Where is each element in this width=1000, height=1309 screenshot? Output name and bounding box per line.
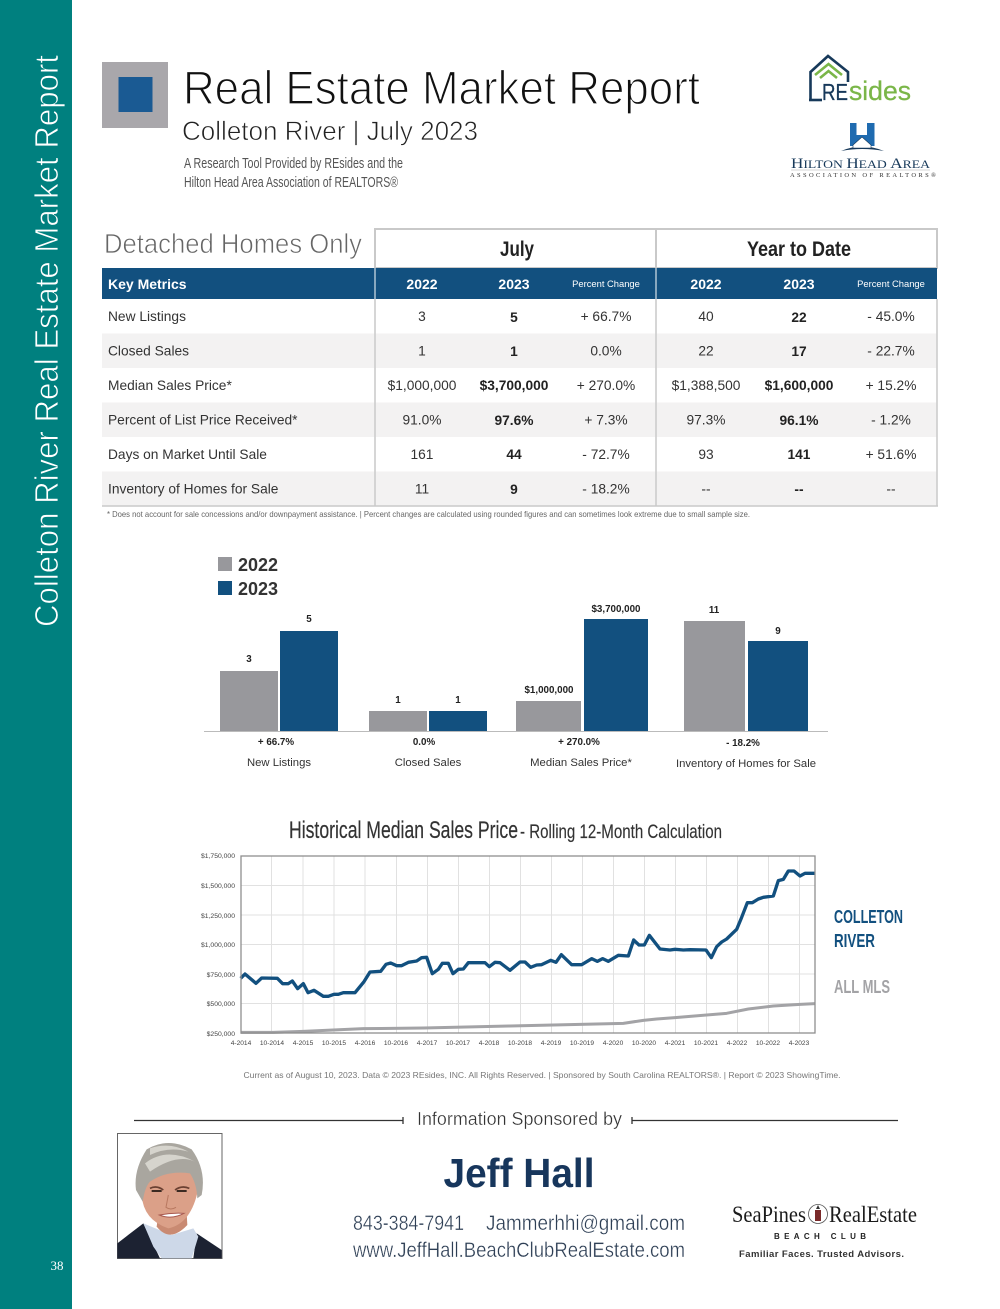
- row: closed sales: 1: [418, 344, 426, 358]
- y axis labels: $1,750,000: [201, 853, 235, 860]
- y axis labels: $750,000: [207, 972, 235, 979]
- row: days on market: 161: [411, 447, 433, 462]
- table header row: [102, 268, 937, 299]
- bars: inventory: - 18.2%: [726, 738, 760, 749]
- sidebar: [0, 0, 72, 1309]
- row: median sales price: $3,700,000: [480, 378, 549, 393]
- row: new listings: + 66.7%: [581, 309, 631, 324]
- row: days on market: 93: [698, 447, 714, 462]
- y axis labels: $250,000: [207, 1031, 235, 1038]
- x axis labels: 10-2014: [260, 1040, 284, 1047]
- x axis labels: 4-2014: [231, 1040, 252, 1047]
- row: median sales price: + 270.0%: [577, 378, 635, 393]
- row: percent of list price: 91.0%: [402, 412, 442, 428]
- logo: Sea Pines Real Estate: BEACH CLUB: [774, 1232, 866, 1241]
- row: new listings: 3: [418, 309, 426, 324]
- bars: closed sales: 0.0%: [413, 737, 435, 748]
- provider note: [184, 155, 403, 191]
- bars: median sales price: $1,000,000: [524, 685, 574, 696]
- logo: REsides: sides: [849, 76, 911, 106]
- row: new listings: 22: [791, 310, 807, 325]
- row: new listings: - 45.0%: [867, 309, 915, 324]
- row: days on market: 44: [506, 447, 522, 462]
- row: new listings: New Listings: [108, 309, 186, 324]
- row: days on market: [108, 447, 916, 462]
- sponsor contact: www.JeffHall.BeachClubRealEstate.com: [352, 1239, 685, 1262]
- table header row: 2022: [406, 276, 438, 292]
- row: percent of list price: 96.1%: [780, 413, 818, 428]
- x axis labels: 10-2021: [694, 1040, 718, 1047]
- bars: new listings: + 66.7%: [258, 737, 294, 748]
- x axis labels: 4-2015: [293, 1040, 314, 1047]
- table group headings: [500, 238, 851, 261]
- row: percent of list price: - 1.2%: [871, 412, 911, 428]
- row: inventory: 11: [415, 482, 429, 496]
- x axis labels: 10-2018: [508, 1040, 532, 1047]
- bars: closed sales: 1: [455, 695, 461, 706]
- x axis labels: 4-2023: [789, 1040, 810, 1047]
- subtitle: Colleton River | July 2023: [182, 116, 478, 146]
- bars: inventory: [676, 605, 816, 770]
- row: percent of list price: [108, 412, 911, 428]
- y axis labels: $1,500,000: [201, 883, 235, 890]
- bars: new listings: 5: [306, 614, 312, 625]
- row: inventory: --: [794, 482, 804, 497]
- row: days on market: + 51.6%: [866, 447, 916, 462]
- x axis labels: 4-2017: [417, 1040, 438, 1047]
- bars: median sales price: + 270.0%: [558, 737, 600, 748]
- line chart: [201, 853, 815, 1047]
- bars: inventory: 9: [775, 626, 781, 637]
- bars: inventory: 11: [709, 605, 720, 616]
- table header row: Percent Change: [572, 278, 640, 289]
- x axis labels: 4-2021: [665, 1040, 686, 1047]
- table group headings: July: [500, 238, 534, 261]
- sponsor contact: [352, 1212, 685, 1262]
- row: closed sales: 22: [698, 344, 714, 358]
- photo: Jeff Hall: [117, 1134, 222, 1258]
- bars: closed sales: [369, 695, 487, 769]
- data source note: Current as of August 10, 2023. Data © 2023 REsides, INC. All Rights Reserved. | Sponsored by South Carolina REALTORS®. | Report © 2023 ShowingTime.: [244, 1070, 841, 1080]
- logo: Hilton Head Area: ASSOCIATION OF REALTORS®: [790, 172, 936, 179]
- row: median sales price: [108, 378, 916, 393]
- x axis labels: 4-2022: [727, 1040, 748, 1047]
- line: all MLS: [241, 1004, 815, 1032]
- row: closed sales: 17: [791, 344, 807, 359]
- row: median sales price: $1,388,500: [672, 378, 741, 393]
- logo: Sea Pines Real Estate: RealEstate: [829, 1202, 917, 1227]
- footnote: * Does not account for sale concessions and/or downpayment assistance. | Percent changes are calculated using rounded figures and can sometimes look extreme due to small sample size.: [107, 509, 750, 519]
- table row stripes: [102, 334, 937, 506]
- row: closed sales: - 22.7%: [867, 344, 915, 358]
- table header row: 2022: [690, 276, 722, 292]
- legend: All MLS: ALL MLS: [834, 977, 890, 997]
- table header row: 2023: [783, 276, 815, 292]
- x axis labels: [231, 1040, 810, 1047]
- row: closed sales: 1: [510, 344, 518, 359]
- bars: median sales price: $3,700,000: [591, 604, 641, 615]
- row: percent of list price: + 7.3%: [584, 412, 628, 428]
- bars: median sales price: Median Sales Price*: [530, 757, 632, 769]
- row: percent of list price: 97.3%: [686, 412, 726, 428]
- table header row: Percent Change: [857, 278, 925, 289]
- y axis labels: $1,000,000: [201, 942, 235, 949]
- y axis labels: $1,250,000: [201, 913, 235, 920]
- table header row: Key Metrics: [108, 276, 187, 292]
- row: median sales price: Median Sales Price*: [108, 378, 232, 393]
- table group headings: Year to Date: [747, 238, 851, 261]
- row: percent of list price: 97.6%: [494, 413, 534, 428]
- row: closed sales: 0.0%: [590, 344, 622, 358]
- row: median sales price: $1,000,000: [388, 378, 457, 393]
- row: inventory: [108, 482, 896, 497]
- sponsor contact: Jammerhhi@gmail.com: [486, 1212, 685, 1235]
- logo: REsides: [809, 56, 911, 106]
- row: inventory: Inventory of Homes for Sale: [108, 482, 279, 496]
- x axis labels: 10-2017: [446, 1040, 470, 1047]
- sponsor heading: [134, 1109, 898, 1129]
- provider note: Hilton Head Area Association of REALTORS®: [184, 174, 398, 191]
- row: median sales price: $1,600,000: [765, 378, 834, 393]
- bar chart: legend: 2023: [238, 579, 278, 599]
- legend: Colleton River: COLLETON: [834, 907, 903, 927]
- row: closed sales: [108, 344, 915, 359]
- row: new listings: 40: [698, 309, 714, 324]
- row: inventory: --: [701, 482, 711, 496]
- row: inventory: 9: [510, 482, 518, 497]
- bar chart: legend: [218, 555, 278, 599]
- x axis labels: 4-2018: [479, 1040, 500, 1047]
- bars: new listings: [220, 614, 338, 769]
- legend: Colleton River: [834, 907, 903, 951]
- logo: Sea Pines Real Estate: [732, 1202, 917, 1260]
- row: new listings: [108, 309, 915, 325]
- logo: Hilton Head Area: HILTON HEAD AREA: [791, 156, 930, 172]
- line chart title: Historical Median Sales Price: [289, 817, 518, 844]
- bar chart: [204, 604, 828, 770]
- row: inventory: --: [886, 482, 896, 496]
- y axis labels: $500,000: [207, 1001, 235, 1008]
- legend: Colleton River: RIVER: [834, 931, 875, 951]
- row: percent of list price: Percent of List Price Received*: [108, 412, 298, 428]
- row: days on market: - 72.7%: [582, 447, 630, 462]
- x axis labels: 10-2020: [632, 1040, 656, 1047]
- x axis labels: 10-2015: [322, 1040, 346, 1047]
- sponsor name: Jeff Hall: [444, 1150, 594, 1196]
- row: days on market: 141: [788, 447, 811, 462]
- table: key metrics: [102, 229, 938, 506]
- title: Real Estate Market Report: [183, 61, 700, 114]
- bars: closed sales: Closed Sales: [395, 757, 462, 769]
- bars: new listings: New Listings: [247, 757, 311, 769]
- row: new listings: 5: [510, 310, 518, 325]
- provider note: A Research Tool Provided by REsides and the: [184, 155, 403, 172]
- table header row: 2023: [498, 276, 530, 292]
- bars: closed sales: 1: [395, 695, 401, 706]
- gridlines: [241, 856, 815, 1033]
- sponsor contact: 843-384-7941: [353, 1212, 464, 1235]
- bars: median sales price: [516, 604, 648, 769]
- logo: Sea Pines Real Estate: Familiar Faces. Trusted Advisors.: [739, 1249, 904, 1260]
- x axis labels: 10-2016: [384, 1040, 408, 1047]
- row: closed sales: Closed Sales: [108, 344, 189, 358]
- bar chart: legend: 2022: [238, 555, 278, 575]
- row: inventory: - 18.2%: [582, 482, 630, 496]
- logo: Sea Pines Real Estate: SeaPines: [732, 1202, 806, 1227]
- row: median sales price: + 15.2%: [866, 378, 916, 393]
- x axis labels: 10-2019: [570, 1040, 594, 1047]
- logo: REsides: RE: [822, 79, 848, 105]
- sponsor heading: Information Sponsored by: [417, 1109, 622, 1129]
- logo: Hilton Head Area: [790, 123, 936, 179]
- x axis labels: 4-2016: [355, 1040, 376, 1047]
- y axis labels: [201, 853, 235, 1038]
- line chart title: - Rolling 12-Month Calculation: [520, 821, 722, 843]
- bars: inventory: Inventory of Homes for Sale: [676, 758, 816, 770]
- page number: 38: [50, 1258, 64, 1273]
- x axis labels: 10-2022: [756, 1040, 780, 1047]
- bars: new listings: 3: [246, 654, 252, 665]
- x axis labels: 4-2020: [603, 1040, 624, 1047]
- row: days on market: Days on Market Until Sale: [108, 447, 267, 462]
- sidebar title: Colleton River Real Estate Market Report: [28, 55, 65, 627]
- x axis labels: 4-2019: [541, 1040, 562, 1047]
- line: Colleton River: [241, 871, 815, 996]
- heading: detached homes: Detached Homes Only: [104, 228, 362, 259]
- icon: header square: [102, 62, 168, 128]
